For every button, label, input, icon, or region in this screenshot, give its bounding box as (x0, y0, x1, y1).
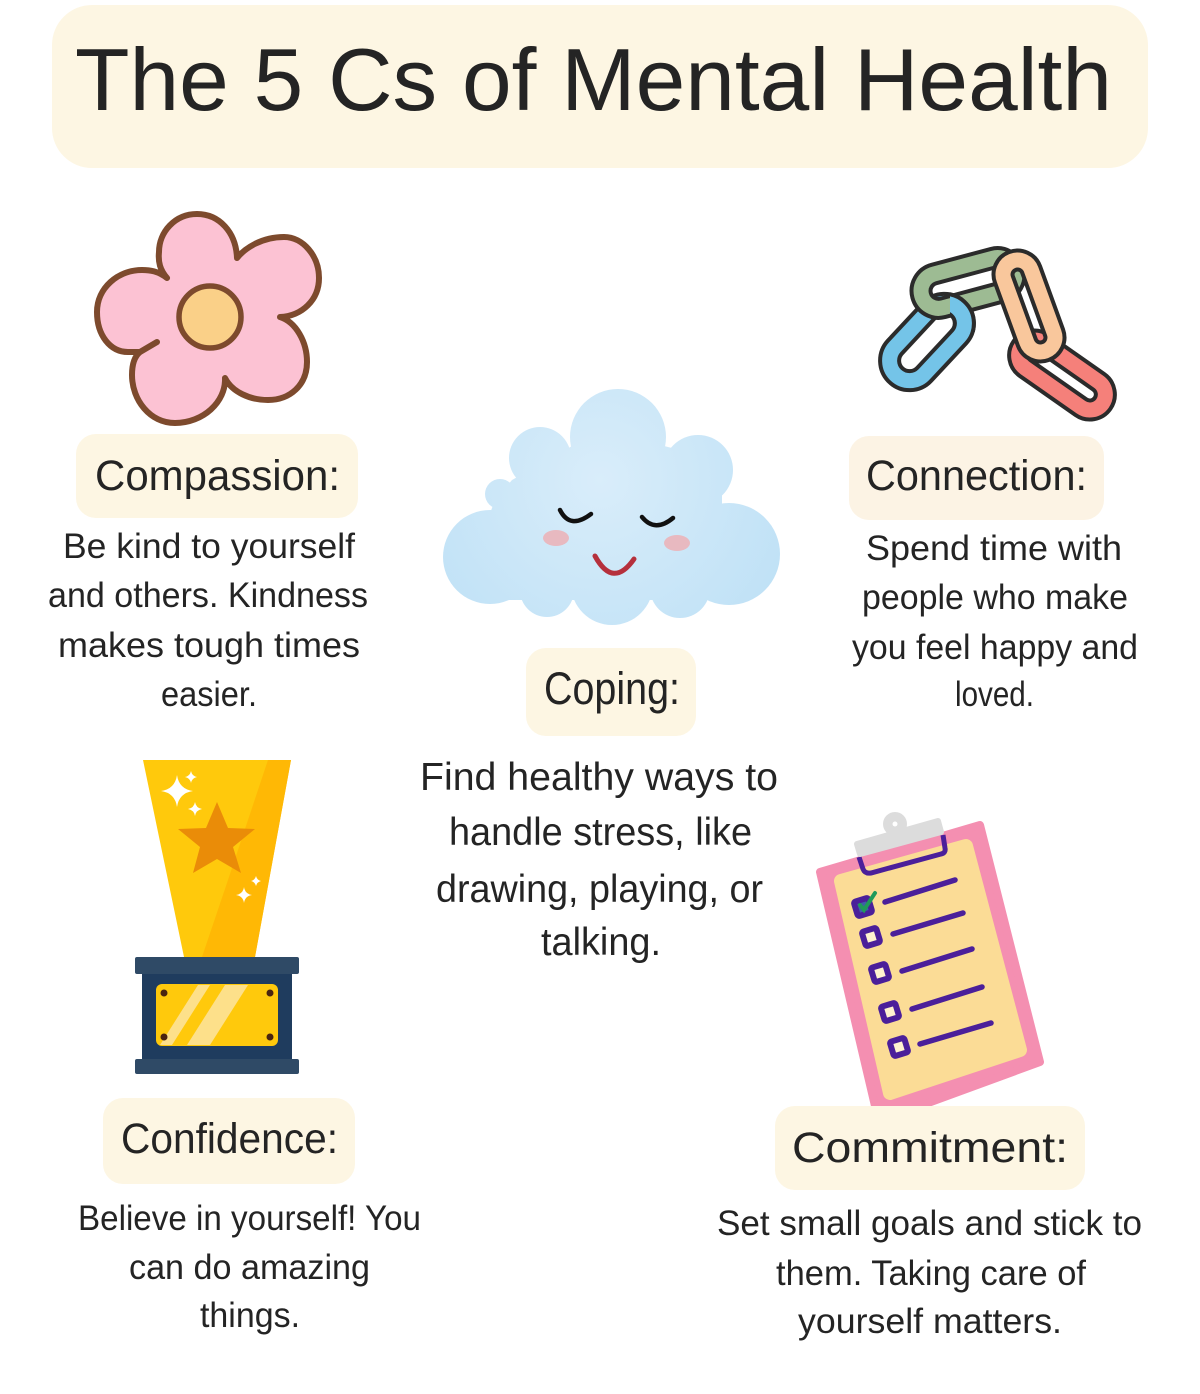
plaque (156, 984, 278, 1046)
text: compassion description: and others. Kindness (48, 576, 368, 615)
text: compassion description (48, 527, 368, 714)
heading: confidence (103, 1098, 355, 1184)
text: connection description: you feel happy and (852, 628, 1138, 667)
text: coping description: drawing, playing, or (436, 868, 763, 911)
blue link overlap (950, 292, 976, 332)
blue link (881, 295, 973, 389)
icon: smiling cloud (443, 389, 780, 625)
panel: commitment (717, 1106, 1142, 1341)
heading: compassion: Compassion: (95, 452, 340, 500)
eyes (560, 510, 673, 525)
heading: compassion (76, 434, 358, 518)
trophy base (142, 970, 292, 1062)
panel: coping (420, 648, 778, 964)
icon: trophy (135, 760, 299, 1074)
text: confidence description: can do amazing (129, 1248, 370, 1287)
heading: coping: Coping: (544, 663, 680, 714)
green link (917, 254, 1019, 312)
green check (860, 893, 875, 910)
text: connection description: people who make (862, 578, 1128, 617)
mouth (595, 556, 634, 573)
text: confidence description: Believe in yourself! You (78, 1199, 421, 1238)
blush (543, 530, 569, 546)
panel: compassion (48, 434, 368, 714)
text: commitment description: yourself matters. (798, 1302, 1062, 1341)
checklist lines (885, 880, 991, 1044)
heading: connection (849, 436, 1104, 520)
coral link (1013, 334, 1111, 416)
checklist boxes (854, 898, 908, 1056)
text: connection description: loved. (955, 675, 1034, 714)
icon: flower (97, 214, 319, 423)
text: compassion description: easier. (161, 675, 257, 714)
text: connection description: Spend time with (866, 529, 1122, 568)
text: compassion description: makes tough times (58, 626, 360, 665)
heading: connection: Connection: (866, 452, 1087, 500)
star (178, 802, 255, 873)
panel: confidence (78, 1098, 421, 1335)
panel: connection (849, 436, 1138, 714)
text: compassion description: Be kind to yourself (63, 527, 355, 566)
text: coping description: Find healthy ways to (420, 756, 778, 799)
heading: confidence: Confidence: (121, 1115, 338, 1163)
peach link (999, 256, 1059, 356)
text: confidence description (78, 1199, 421, 1335)
text: coping description (420, 756, 778, 964)
text: commitment description: them. Taking care of (776, 1254, 1086, 1293)
icon: chain links (881, 254, 1111, 416)
text: confidence description: things. (200, 1296, 300, 1335)
text: coping description: talking. (541, 921, 661, 964)
icon: clipboard (820, 812, 1040, 1106)
text: connection description (852, 529, 1138, 714)
title banner (52, 5, 1148, 168)
clip (859, 835, 945, 873)
heading: commitment (775, 1106, 1085, 1190)
heading: coping (526, 648, 696, 736)
text: commitment description (717, 1204, 1142, 1341)
heading: commitment: Commitment: (792, 1124, 1068, 1172)
sparkles (161, 775, 193, 807)
title: The 5 Cs of Mental Health (75, 30, 1112, 129)
text: commitment description: Set small goals and stick to (717, 1204, 1142, 1243)
text: coping description: handle stress, like (449, 811, 752, 854)
